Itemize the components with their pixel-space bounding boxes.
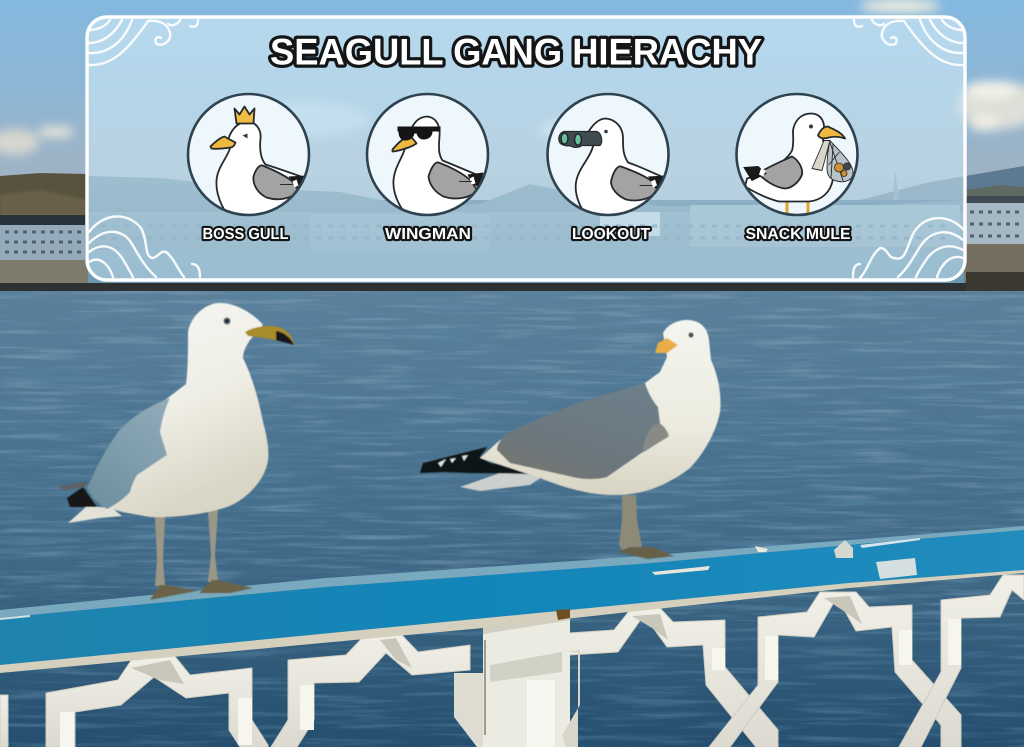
corner ornament: top left <box>89 20 198 65</box>
photo gull: left <box>58 303 294 600</box>
railing: blue front face <box>0 530 1024 665</box>
railing: cream underside <box>0 570 1024 673</box>
icon detail: sunglasses <box>398 126 440 140</box>
background: sea <box>0 291 1024 747</box>
railing: chipped paint <box>0 538 920 620</box>
railing post <box>454 612 580 747</box>
label: boss gull: BOSS GULL <box>202 226 288 243</box>
icon detail: cloth strap <box>812 140 830 170</box>
background: clouds <box>0 0 1024 155</box>
eye <box>224 318 230 324</box>
tail <box>460 473 545 491</box>
background: seafront town <box>0 196 1024 260</box>
wing <box>497 383 668 479</box>
feet <box>150 580 253 600</box>
panel: hierarchy card <box>87 17 965 280</box>
background: distant hills <box>0 166 1024 225</box>
icon: snack mule <box>736 94 858 215</box>
railing: pale top surface <box>0 526 1024 618</box>
label: wingman: WINGMAN <box>385 226 471 243</box>
icon: lookout <box>548 94 668 224</box>
icon detail: binoculars <box>559 132 602 147</box>
corner ornament: bottom right <box>853 218 963 278</box>
body <box>480 320 721 495</box>
icon: wingman <box>367 94 488 224</box>
wing <box>87 398 170 509</box>
beak <box>245 326 294 345</box>
legs <box>155 510 218 586</box>
icon: boss gull <box>188 94 309 224</box>
background: beach <box>0 244 1024 293</box>
tail <box>68 506 122 523</box>
beak <box>655 338 678 353</box>
corner ornament: bottom left <box>89 216 200 277</box>
background: sky <box>0 0 1024 200</box>
eye <box>688 332 694 338</box>
corner ornament: top right <box>854 20 963 65</box>
body <box>100 303 268 517</box>
photo gull: right <box>420 320 721 559</box>
title: SEAGULL GANG HIERACHY <box>270 32 762 72</box>
label: snack mule: SNACK MULE <box>746 226 850 243</box>
foot <box>618 547 674 559</box>
icon detail: snack bag <box>827 140 853 182</box>
label: lookout: LOOKOUT <box>572 226 651 243</box>
legs <box>619 495 642 550</box>
railing lattice <box>0 575 1024 747</box>
